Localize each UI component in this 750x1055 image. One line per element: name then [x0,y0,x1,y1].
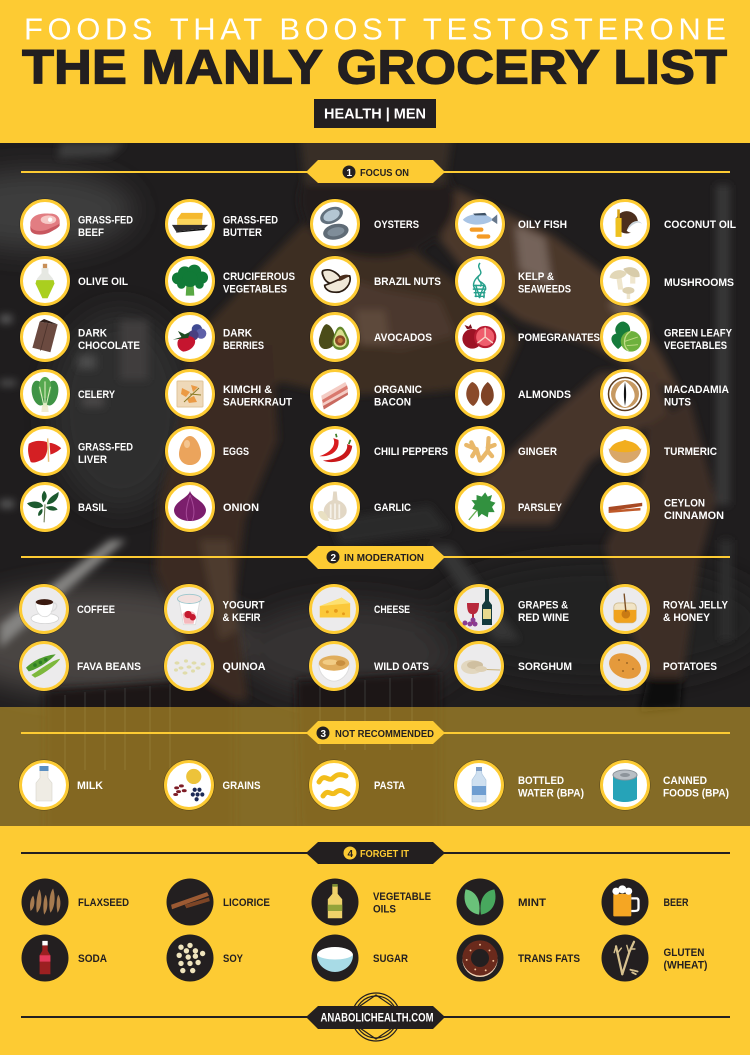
item: organic bacon [310,369,422,419]
item: soy: SOY [223,953,244,965]
item: milk [19,760,103,810]
chest and torso [209,222,520,396]
item: dark chocolate: CHOCOLATE [78,340,140,352]
item: grains: GRAINS [222,780,260,792]
item: turmeric: TURMERIC [664,446,717,458]
item: kelp and seaweeds: KELP & [518,271,554,283]
badge: health men: HEALTH | MEN [324,106,426,122]
item: yogurt and kefir [164,584,265,634]
item: green leafy vegetables [600,312,733,362]
item: cheese: CHEESE [374,604,410,616]
item: brazil nuts: BRAZIL NUTS [374,276,441,288]
item: olive oil [20,256,128,306]
item: ceylon cinnamon [600,482,724,532]
item: macadamia nuts: MACADAMIA [664,384,729,396]
item: wild oats [309,641,429,691]
item: canned foods: CANNED [663,775,707,787]
item: royal jelly and honey: ROYAL JELLY [663,600,729,612]
badge: health men [314,99,436,128]
item: grass-fed butter: GRASS-FED [223,214,278,226]
item: chili peppers [310,426,448,476]
section header 3: not recommended [21,721,730,744]
item: green leafy vegetables: VEGETABLES [664,340,727,352]
item: soda [22,934,107,982]
item: avocados: AVOCADOS [374,332,432,344]
item: kelp and seaweeds: SEAWEEDS [518,284,571,296]
item: coconut oil [600,199,736,249]
title: foods that boost testosterone: FOODS THAT BOOST TESTOSTERONE [24,12,726,46]
item: potatoes: POTATOES [663,661,717,673]
item: grapes and red wine: GRAPES & [518,600,568,612]
section header 1: focus on: FOCUS ON [360,167,409,179]
item: celery [20,369,116,419]
item: wild oats: WILD OATS [374,661,429,673]
section header 1: focus on: 1 [346,168,352,179]
panel: focus on items [20,199,736,532]
item: celery: CELERY [78,389,116,401]
item: oysters [310,199,419,249]
section 3 yellow overlay [0,707,750,826]
title: the manly grocery list: THE MANLY GROCERY LIST [22,42,727,94]
item: avocados [310,312,432,362]
item: pomegranates: POMEGRANATES [518,332,600,344]
item: grass-fed butter [165,199,278,249]
item: garlic [310,482,411,532]
right thigh and lower leg [605,400,716,680]
item: basil: BASIL [78,502,107,514]
item: kelp and seaweeds [455,256,571,306]
item: soy [166,934,244,982]
item: coffee [19,584,115,634]
item: royal jelly and honey [600,584,729,634]
item: eggs: EGGS [223,446,249,458]
panel: forget it items [22,878,708,982]
item: soda: SODA [78,953,107,965]
item: grass-fed beef: GRASS-FED [78,214,133,226]
item: mushrooms: MUSHROOMS [664,277,734,289]
item: dark chocolate: DARK [78,328,107,340]
item: pasta [309,760,405,810]
item: quinoa: QUINOA [222,661,266,673]
item: oily fish: OILY FISH [518,219,567,231]
hair [336,202,456,258]
item: coffee: COFFEE [77,604,115,616]
item: yogurt and kefir: YOGURT [222,600,265,612]
section header 3: not recommended: NOT RECOMMENDED [335,728,434,740]
item: flaxseed: FLAXSEED [78,897,129,909]
item: trans fats: TRANS FATS [518,953,580,965]
section header 2: in moderation [21,546,730,569]
panel: in moderation items [19,584,729,691]
item: grains [164,760,260,810]
item: licorice [166,878,270,926]
item: bottled water [454,760,584,810]
item: kimchi and sauerkraut: KIMCHI & [223,384,272,396]
item: grass-fed beef [20,199,133,249]
item: trans fats [456,934,580,982]
section header 1: focus on [21,160,730,183]
item: olive oil: OLIVE OIL [78,276,128,288]
item: quinoa [164,641,266,691]
item: macadamia nuts: NUTS [664,396,691,408]
item: flaxseed [22,878,129,926]
item: sugar [312,934,408,982]
item: kimchi and sauerkraut [165,369,292,419]
item: sorghum: SORGHUM [518,661,572,673]
item: ceylon cinnamon: CEYLON [664,498,705,510]
logo emblem [352,993,400,1041]
item: brazil nuts [310,256,441,306]
item: vegetable oils: VEGETABLE [373,891,431,903]
forearm [470,372,670,525]
item: beer: BEER [664,897,689,909]
section header 2: in moderation: 2 [330,553,336,564]
item: licorice: LICORICE [223,897,270,909]
item: gluten wheat [602,934,708,982]
item: milk: MILK [77,780,103,792]
section header 4: forget it [21,842,730,864]
item: gluten wheat: (WHEAT) [664,960,708,972]
item: vegetable oils [312,878,431,926]
item: mushrooms [600,256,734,306]
item: fava beans [19,641,141,691]
item: ginger: GINGER [518,446,557,458]
item: fava beans: FAVA BEANS [77,661,141,673]
left arm [155,345,278,700]
item: grapes and red wine: RED WINE [518,612,569,624]
item: parsley [455,482,563,532]
item: grass-fed liver: GRASS-FED [78,442,133,454]
item: cruciferous vegetables: VEGETABLES [223,284,287,296]
header band [0,0,750,143]
item: basil [20,482,107,532]
panel: not recommended items [19,760,729,810]
item: almonds: ALMONDS [518,389,571,401]
item: green leafy vegetables: GREEN LEAFY [664,328,733,340]
item: kimchi and sauerkraut: SAUERKRAUT [223,396,292,408]
item: almonds [455,369,571,419]
item: onion: ONION [223,502,259,514]
weight plates [45,680,235,830]
footer yellow band [0,826,750,1055]
item: chili peppers: CHILI PEPPERS [374,446,448,458]
item: coconut oil: COCONUT OIL [664,219,736,231]
item: onion [165,482,259,532]
item: garlic: GARLIC [374,502,411,514]
item: grass-fed butter: BUTTER [223,227,262,239]
section header 3: not recommended: 3 [320,729,326,740]
item: mint: MINT [518,897,546,909]
item: oysters: OYSTERS [374,219,419,231]
section header 2: in moderation: IN MODERATION [344,552,424,564]
item: dark berries: DARK [223,328,252,340]
item: cruciferous vegetables: CRUCIFEROUS [223,271,295,283]
item: grapes and red wine [454,584,569,634]
item: ceylon cinnamon: CINNAMON [664,510,724,522]
footer: anabolichealth.com with logo: ANABOLICHEALTH.COM [320,1010,434,1024]
item: potatoes [600,641,717,691]
item: grass-fed liver: LIVER [78,454,107,466]
item: dark berries: BERRIES [223,340,264,352]
item: yogurt and kefir: & KEFIR [222,612,261,624]
item: royal jelly and honey: & HONEY [663,612,711,624]
item: mint [456,878,546,926]
item: macadamia nuts [600,369,729,419]
item: bottled water: WATER (BPA) [518,788,584,800]
item: parsley: PARSLEY [518,502,563,514]
item: ginger [455,426,557,476]
item: organic bacon: ORGANIC [374,384,422,396]
item: pasta: PASTA [374,780,405,792]
background photo: bodybuilder in gym [0,135,750,830]
item: organic bacon: BACON [374,396,411,408]
item: gluten wheat: GLUTEN [664,947,705,959]
item: turmeric [600,426,717,476]
item: bottled water: BOTTLED [518,775,564,787]
item: pomegranates [455,312,600,362]
item: grass-fed beef: BEEF [78,227,104,239]
item: oily fish [455,199,567,249]
item: dark berries [165,312,264,362]
section header 4: forget it: FORGET IT [360,848,410,860]
item: cruciferous vegetables [165,256,295,306]
item: dark chocolate [20,312,140,362]
item: cheese [309,584,410,634]
item: vegetable oils: OILS [373,904,396,916]
item: sugar: SUGAR [373,953,408,965]
footer: anabolichealth.com with logo [21,993,730,1041]
item: grass-fed liver [20,426,133,476]
item: sorghum [454,641,572,691]
upper arm and shoulder [440,189,682,395]
section header 4: forget it: 4 [348,849,354,860]
item: beer [602,878,689,926]
item: canned foods: FOODS (BPA) [663,788,729,800]
item: canned foods [600,760,729,810]
item: eggs [165,426,249,476]
